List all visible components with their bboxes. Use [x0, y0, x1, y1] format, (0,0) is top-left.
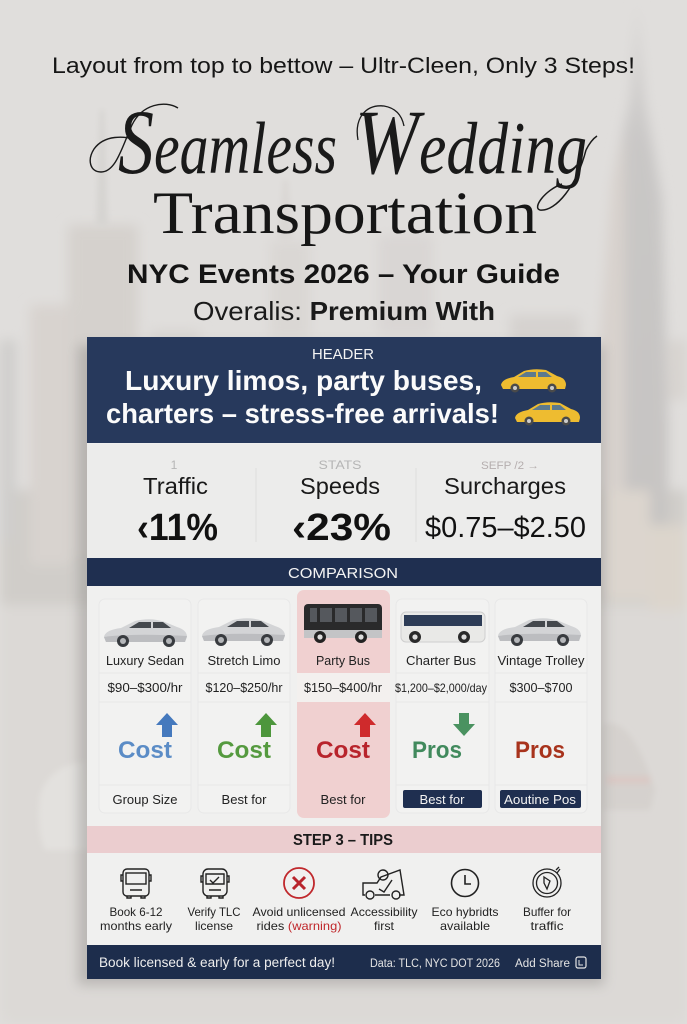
headline line 1: Luxury limos, party buses,: [125, 365, 482, 396]
column: luxury sedan: $90–$300/hr: [108, 681, 182, 695]
title: script line: Wedding: [355, 91, 587, 193]
stat: surcharges: Surcharges: [444, 473, 566, 499]
column: party bus (highlighted): Best for: [320, 793, 366, 807]
column: luxury sedan: [99, 599, 191, 813]
tip: buffer for traffic: Buffer for: [523, 905, 571, 919]
tip: verify license: Verify TLC: [188, 905, 241, 919]
column: luxury sedan: Luxury Sedan: [106, 654, 184, 668]
tip: eco hybrids: available: [440, 919, 490, 933]
step 3 heading: STEP 3 – TIPS: [293, 832, 393, 849]
column: charter bus: [395, 599, 489, 813]
panel: main card: [87, 337, 601, 979]
tip: book early: [100, 869, 172, 933]
stat: speeds: ‹23%: [292, 507, 391, 549]
icon: yellow car 1: [501, 369, 566, 392]
stat: speeds: STATS: [318, 458, 362, 472]
icon: charter bus: [401, 612, 485, 643]
header label: HEADER: [312, 346, 374, 363]
panel: comparison columns: [87, 586, 601, 826]
title: script line: Seamless: [118, 91, 337, 193]
column: luxury sedan: Cost: [118, 737, 172, 764]
column: party bus (highlighted): Party Bus: [316, 654, 370, 668]
tip: avoid unlicensed rides (warning): rides (warning): [256, 919, 342, 933]
column: charter bus: Best for: [420, 793, 464, 807]
column: vintage trolley: [495, 599, 587, 813]
headline line 2: charters – stress-free arrivals!: [106, 398, 499, 429]
column: vintage trolley: Aoutine Pos: [504, 793, 576, 807]
tip: accessibility: first: [374, 919, 395, 933]
comparison heading: [87, 558, 601, 586]
tip: verify license: license: [195, 919, 233, 933]
column: party bus (highlighted): $150–$400/hr: [304, 681, 382, 695]
footer data source: Data: TLC, NYC DOT 2026: [370, 958, 500, 970]
stat: speeds: Speeds: [300, 473, 380, 499]
subtitle: NYC Events 2026 – Your Guide: [127, 259, 560, 289]
stat: speeds: [292, 458, 391, 549]
column: charter bus: Charter Bus: [406, 654, 476, 668]
overall line: Overalis: Premium With: [193, 296, 495, 326]
tip: accessibility: Accessibility: [350, 905, 418, 919]
tip: verify license: [188, 869, 241, 933]
title: serif line: Transportation: [153, 180, 537, 246]
stat: traffic: [137, 458, 218, 549]
column: party bus (highlighted): [297, 590, 390, 818]
tip: book early: Book 6-12: [110, 905, 163, 919]
column: stretch limo: [198, 599, 290, 813]
stat: traffic: ‹11%: [137, 507, 218, 549]
column: vintage trolley: Vintage Trolley: [498, 654, 585, 668]
comparison heading: COMPARISON: [288, 565, 398, 582]
stat: surcharges: SEFP /2 →: [481, 460, 539, 472]
top tagline: Layout from top to bettow – Ultr-Cleen, Only 3 Steps!: [52, 53, 635, 78]
column: stretch limo: Best for: [222, 793, 266, 807]
column: stretch limo: Cost: [217, 737, 271, 764]
tip: eco hybrids: Eco hybridts: [432, 905, 498, 919]
column: stretch limo: Stretch Limo: [208, 654, 281, 668]
stat: surcharges: [425, 460, 586, 544]
icon: party bus: [304, 604, 382, 643]
column: vintage trolley: Pros: [515, 737, 565, 764]
footer call to action: Book licensed & early for a perfect day!: [99, 955, 335, 970]
column: charter bus: Pros: [412, 737, 462, 764]
panel: tips: [87, 853, 601, 945]
footer share: Add Share: [515, 958, 570, 970]
tip: buffer for traffic: traffic: [530, 919, 564, 933]
tip: avoid unlicensed rides (warning): [252, 868, 346, 933]
column: charter bus: $1,200–$2,000/day: [395, 681, 487, 695]
panel: header banner: [87, 337, 601, 443]
column: party bus (highlighted): Cost: [316, 737, 370, 764]
column: stretch limo: $120–$250/hr: [206, 681, 282, 695]
step 3 heading: [87, 826, 601, 853]
tip: avoid unlicensed rides (warning): Avoid unlicensed: [252, 905, 346, 919]
stat: traffic: 1: [171, 458, 178, 472]
tip: eco hybrids: [432, 870, 498, 933]
stat: traffic: Traffic: [143, 473, 208, 499]
panel: stats: [87, 444, 601, 558]
tip: accessibility: [350, 870, 418, 933]
stat: surcharges: $0.75–$2.50: [425, 512, 586, 544]
column: luxury sedan: Group Size: [112, 793, 178, 807]
tip: buffer for traffic: [523, 867, 571, 933]
column: vintage trolley: $300–$700: [510, 681, 573, 695]
tip: book early: months early: [100, 919, 172, 933]
footer bar: [87, 945, 601, 979]
title: script line: [90, 91, 597, 210]
icon: yellow car 2: [515, 402, 580, 426]
